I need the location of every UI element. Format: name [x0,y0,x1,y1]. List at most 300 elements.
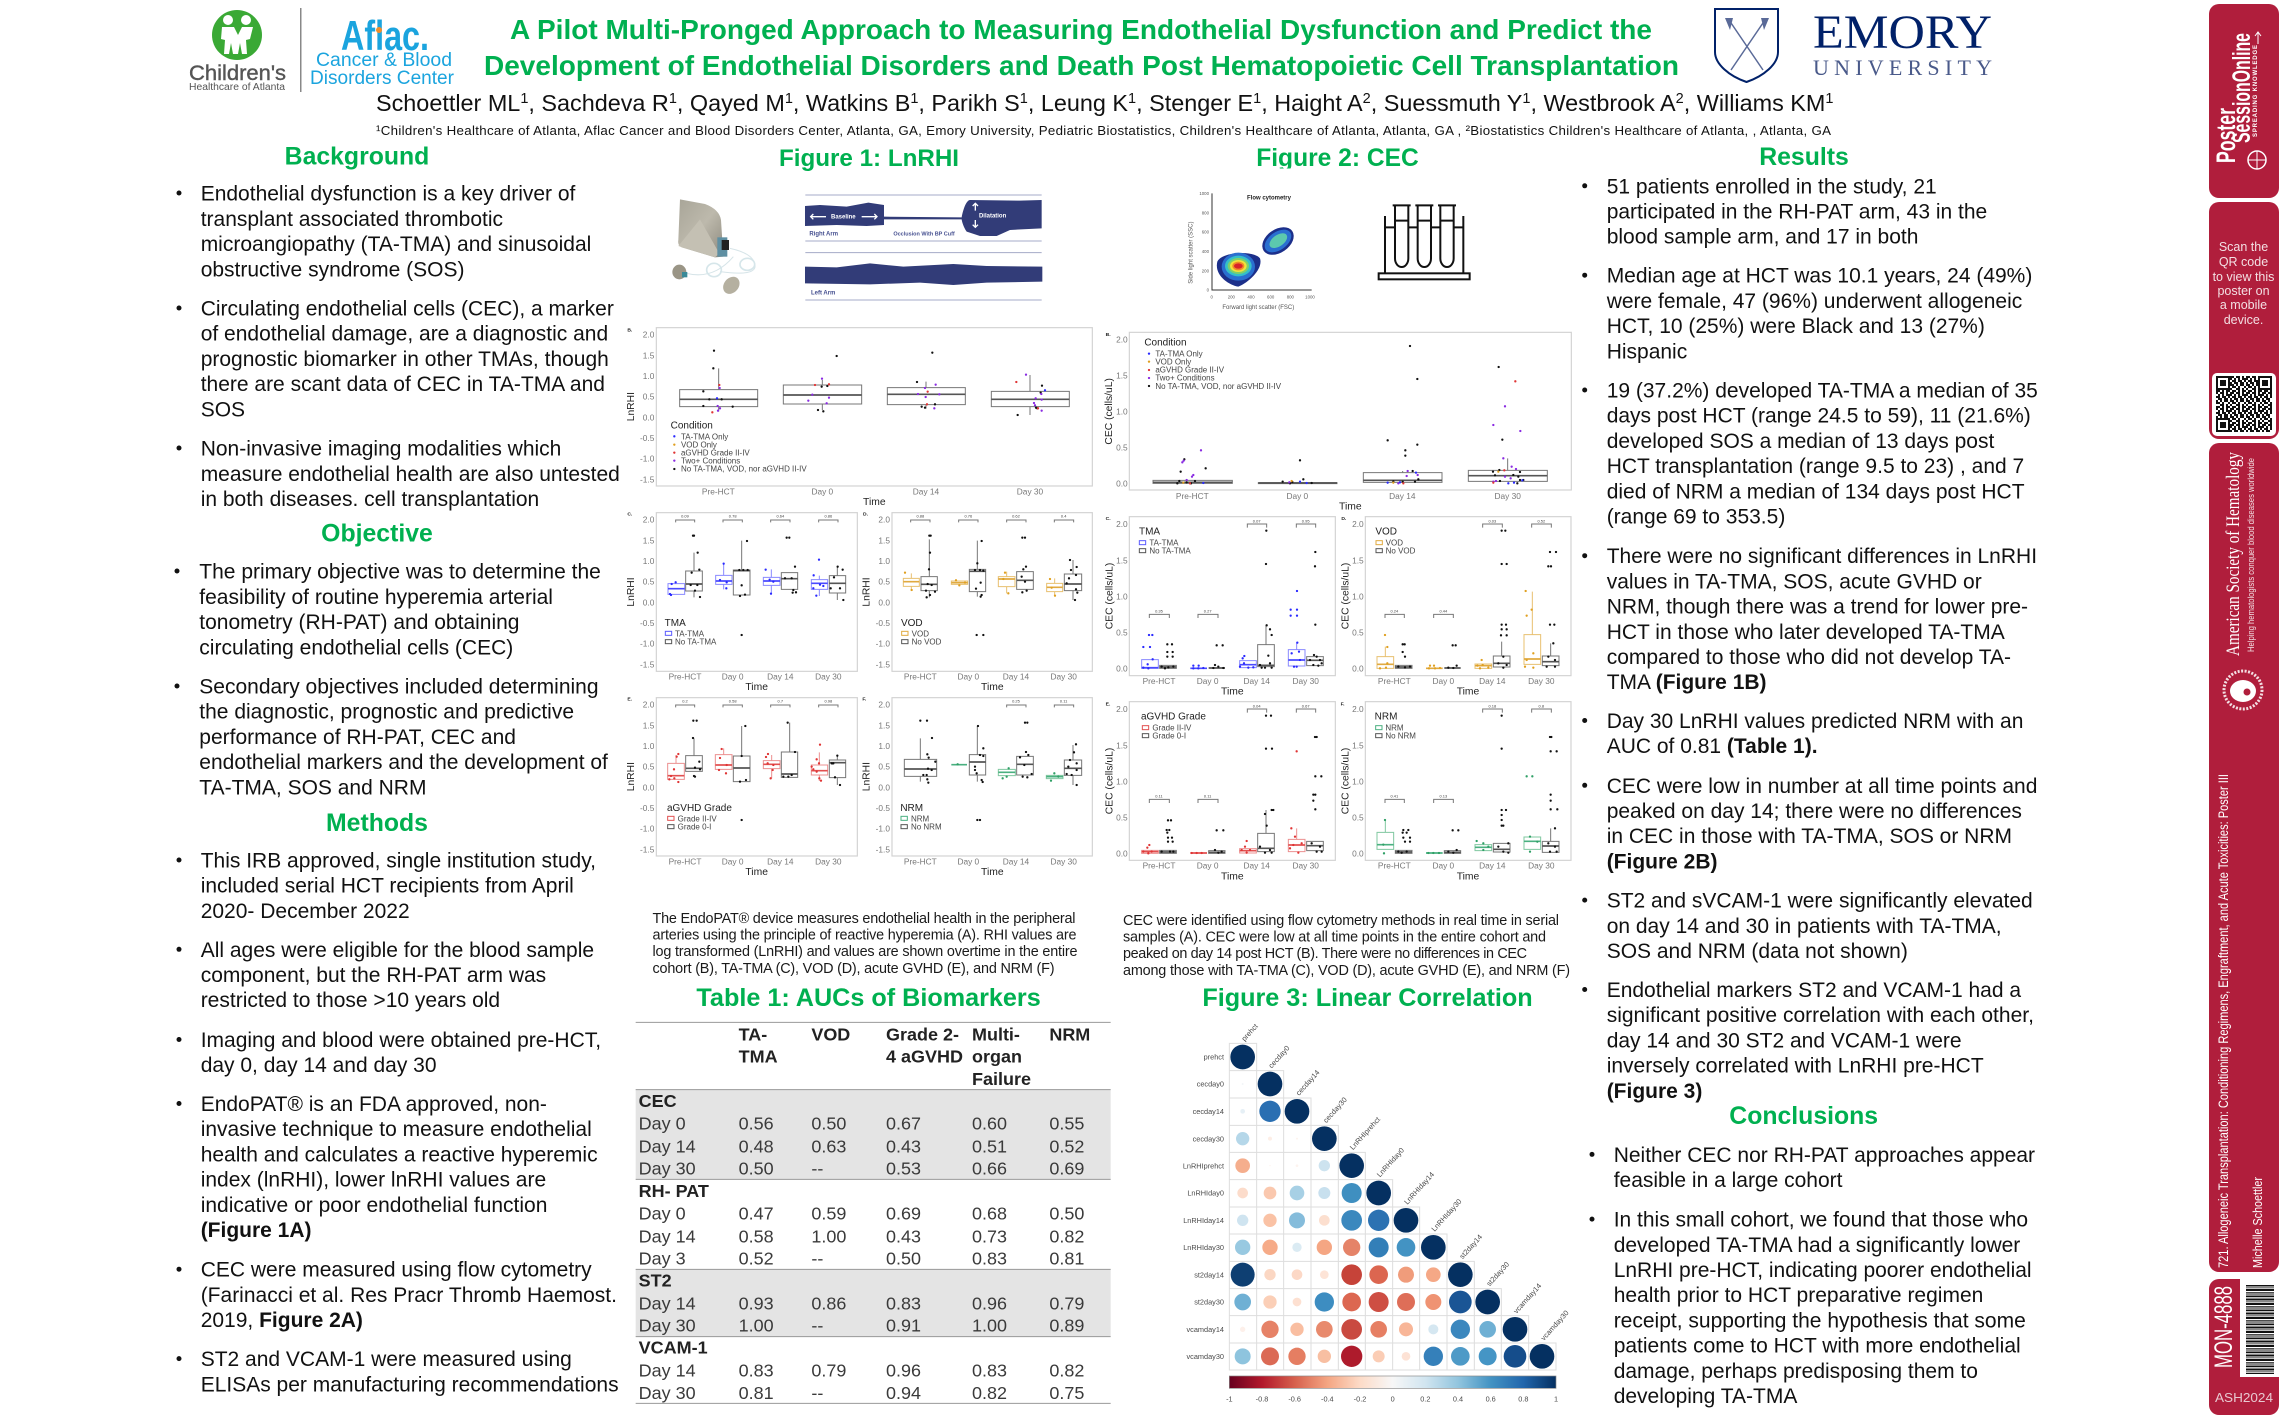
chart: Figure 2B CEC overall: Pre-HCT [1176,491,1209,501]
chart: Figure 1C LnRHI by TMA: 0.5 [643,577,655,587]
logo divider [300,8,302,92]
chart: Figure 1E LnRHI by aGVHD: 0.5 [643,762,655,772]
authors: 1 [1522,91,1530,107]
chart: Figure 2D CEC by VOD: 0.03 [1488,518,1497,523]
authors: , Watkins B [793,90,910,116]
chart: Figure 1D LnRHI by VOD: Time [981,682,1004,693]
column labels: cecday0 [1266,1044,1291,1070]
text block: methods bullets: 2020- December 2022 [201,900,410,923]
text block: methods bullets: indicative or poor endothelial function [201,1194,547,1217]
text block: results bullets: Median age at HCT was 10.1 years, 24 (49%) [1607,265,2032,288]
table: AUCs of biomarkers: TA- [739,1024,767,1044]
chart: Figure 2F CEC by NRM: 0.13 [1439,793,1448,798]
chart: Figure 1B LnRHI overall: Day 14 [913,487,940,497]
chart: Figure 1C LnRHI by TMA: TMA [665,618,686,629]
text block: results bullets: Day 30 LnRHI values predicted NRM with an [1607,710,2023,733]
image: flow cytometry scatter: 1000 [1305,295,1315,300]
text block: results bullets: died of NRM a median of 134 days post HCT [1607,480,2025,503]
table: AUCs of biomarkers: Day 14 [639,1136,696,1156]
text block: results bullets: TMA [1607,671,1656,694]
table: AUCs of biomarkers: 0.91 [886,1316,921,1336]
table: AUCs of biomarkers: 0.94 [886,1383,921,1403]
chart: Figure 2F CEC by NRM [1340,702,1571,882]
affiliations: ¹Children's Healthcare of Atlanta, Aflac Cancer and Blood Disorders Center, Atlanta, GA, Emory University, Pediatric Biostatistics, Children's Healthcare of Atlanta, Atlanta, GA , ²Biostatistics Children's Healthcare of Atlanta, , Atlanta, GA [376,123,1831,138]
logo: Aflac Cancer and Blood Disorders Center: Disorders Center [310,68,455,89]
chart: Figure 1F LnRHI by NRM: Time [981,867,1004,878]
authors: , Leung K [1028,90,1128,116]
table: AUCs of biomarkers: 0.66 [972,1159,1007,1179]
chart: Figure 1C LnRHI by TMA: -1.5 [640,659,655,669]
text block: results bullets: compared to those who did not develop TA- [1607,646,2011,669]
text block: methods bullets: (Figure 1A) [201,1219,312,1242]
row labels: prehct [1204,1053,1224,1062]
chart: Figure 2E CEC by aGVHD: Day 30 [1292,861,1319,871]
heading: Table 1: Table 1: AUCs of Biomarkers [696,984,1041,1012]
heading: Figure 2: Figure 2: CEC [1256,145,1419,172]
text block: results bullets: 51 patients enrolled in the study, 21 [1607,175,1937,198]
table: AUCs of biomarkers: 0.82 [1049,1226,1084,1246]
table: AUCs of biomarkers: NRM [1049,1024,1090,1044]
table: AUCs of biomarkers: organ [972,1047,1022,1067]
image: flow cytometry scatter: 800 [1287,295,1295,300]
chart: Figure 2C CEC by TMA: 1.0 [1116,591,1128,601]
table: AUCs of biomarkers: 0.86 [811,1293,846,1313]
column labels: st2day14 [1457,1233,1484,1261]
column labels: LnRHIday30 [1429,1197,1463,1233]
chart: Figure 1B LnRHI overall: -1.0 [640,454,655,464]
table: AUCs of biomarkers: TMA [739,1047,778,1067]
row labels: st2day14 [1194,1270,1224,1279]
chart: Figure 1B LnRHI overall: Pre-HCT [702,487,735,497]
chart: Figure 1D LnRHI by VOD [861,512,1092,693]
chart: Figure 1E LnRHI by aGVHD: -0.5 [640,803,655,813]
chart: Figure 2D CEC by VOD: Day 30 [1528,676,1555,686]
chart: Figure 1F LnRHI by NRM: Day 30 [1050,857,1077,867]
chart: Figure 3 correlation matrix [1183,1022,1571,1403]
chart: Figure 2C CEC by TMA: 0.35 [1155,608,1164,613]
chart: Figure 2C CEC by TMA [1104,516,1335,697]
logo: Emory University: UNIVERSITY [1813,55,1992,80]
table: AUCs of biomarkers: -- [811,1159,823,1179]
row labels: LnRHIday0 [1187,1189,1224,1198]
text block: results bullets: Hispanic [1607,340,1687,363]
chart: Figure 2F CEC by NRM: 0.5 [1352,812,1364,822]
table: AUCs of biomarkers: Day 14 [639,1293,696,1313]
chart: Figure 1F LnRHI by NRM [861,697,1092,878]
image: RH-PAT waveform [805,195,1042,300]
table: AUCs of biomarkers: 0.52 [739,1249,774,1269]
text block: background bullets: measure endothelial health are also untested [201,463,620,486]
colour scale: 0.2 [1420,1394,1430,1403]
colour scale: -0.4 [1321,1394,1334,1403]
chart: Figure 1C LnRHI by TMA: Day 14 [767,672,794,682]
table: AUCs of biomarkers: Day 14 [639,1226,696,1246]
chart: Figure 1E LnRHI by aGVHD: 0.7 [778,699,784,704]
heading: Methods: Methods [326,810,428,837]
chart: Figure 1F LnRHI by NRM: 0.0 [878,782,890,792]
chart: Figure 2C CEC by TMA: 0.0 [1116,663,1128,673]
table: AUCs of biomarkers: 0.75 [1049,1383,1084,1403]
table: AUCs of biomarkers: 0.83 [886,1293,921,1313]
chart: Figure 1D LnRHI by VOD: No VOD [912,638,942,647]
authors: 1 [785,91,793,107]
chart: Figure 1B LnRHI overall: Day 0 [811,487,834,497]
image: EndoPAT device [672,199,755,297]
chart: Figure 2C CEC by TMA: Day 30 [1292,676,1319,686]
chart: Figure 1B LnRHI overall: Time [863,497,886,508]
caption: Figure 2: CEC were identified using flow cytometry methods in real time in serial [1123,913,1559,929]
chart: Figure 2B CEC overall: 1.5 [1116,370,1128,380]
chart: Figure 1E LnRHI by aGVHD: -1.5 [640,844,655,854]
text block: methods bullets: index (lnRHI), lower lnRHI values are [201,1169,546,1192]
text block: background bullets: Endothelial dysfunction is a key driver of [201,183,576,206]
text block: results bullets: values in TA-TMA, SOS, acute GVHD or [1607,570,1982,593]
chart: Figure 1F LnRHI by NRM: 1.5 [878,720,890,730]
row labels: LnRHIday30 [1183,1243,1224,1252]
chart: Figure 2C CEC by TMA: 0.27 [1204,608,1212,613]
authors: Schoettler ML [376,90,520,116]
table: AUCs of biomarkers: Multi- [972,1024,1020,1044]
chart: Figure 1F LnRHI by NRM: No NRM [911,823,942,832]
text block: results bullets: NRM, though there was a trend for lower pre- [1607,596,2028,619]
table: AUCs of biomarkers: Day 30 [639,1383,696,1403]
authors: 2 [1363,91,1371,107]
chart: Figure 2F CEC by NRM: 0.8 [1539,703,1545,708]
logo: Children's Healthcare of Atlanta: Children's [189,62,286,85]
text block: results bullets: CEC were low in number at all time points and [1607,775,2037,798]
sidebar panel: American Society of Hematology and session: American Society of Hematology [2223,452,2244,656]
image: flow cytometry scatter: Forward light scatter (FSC) [1222,305,1294,311]
chart: Figure 2D CEC by VOD: Day 14 [1479,676,1506,686]
chart: Figure 1B LnRHI overall: -1.5 [640,474,655,484]
chart: Figure 2B CEC overall: 2.0 [1116,334,1128,344]
chart: Figure 2E CEC by aGVHD [1104,702,1335,882]
chart: Figure 2C CEC by TMA: No TA-TMA [1149,547,1191,556]
chart: Figure 2B CEC overall: VOD Only [1155,358,1191,367]
chart: Figure 2B CEC overall [1104,332,1571,512]
chart: Figure 1D LnRHI by VOD: 1.0 [878,556,890,566]
table: AUCs of biomarkers: 0.53 [886,1159,921,1179]
chart: Figure 1D LnRHI by VOD: 2.0 [878,515,890,525]
image: RH-PAT waveform: Occlusion With BP Cuff [893,231,955,237]
text block: results bullets: developed SOS a median of 13 days post [1607,430,1994,453]
chart: Figure 2B CEC overall: Day 14 [1389,491,1416,501]
chart: Figure 1F LnRHI by NRM: 0.25 [1012,699,1021,704]
table: AUCs of biomarkers: Failure [972,1069,1031,1089]
sidebar panel: PosterSessionOnline logo: Poster [2211,108,2241,163]
chart: Figure 1D LnRHI by VOD: -1.0 [876,639,890,649]
chart: Figure 2D CEC by VOD: 2.0 [1352,519,1364,529]
sidebar panel: poster number and barcode: MON-4888 [2210,1286,2238,1368]
table: AUCs of biomarkers: 0.83 [972,1361,1007,1381]
text block: conclusions bullets: developing TA-TMA [1614,1385,1797,1408]
chart: Figure 1D LnRHI by VOD: D. [863,512,869,518]
row labels: cecday30 [1193,1134,1224,1143]
text block: results bullets: inversely correlated with LnRHI pre-HCT [1607,1055,1984,1078]
text block: results bullets: 19 (37.2%) developed TA-TMA a median of 35 [1607,380,2038,402]
colour scale: 0.4 [1453,1394,1463,1403]
chart: Figure 2F CEC by NRM: Time [1457,871,1480,882]
authors: 1 [669,91,677,107]
caption: Figure 2: samples (A). CEC were low at all time points in the entire cohort and [1123,930,1546,946]
table: AUCs of biomarkers: 0.68 [972,1204,1007,1224]
column labels [1239,1022,1571,1342]
text block: background bullets: SOS [201,398,245,421]
text block: objective bullets: performance of RH-PAT, CEC and [199,726,516,749]
table: AUCs of biomarkers: -- [811,1316,823,1336]
chart: Figure 2B CEC overall: B. [1106,332,1111,338]
chart: Figure 2E CEC by aGVHD: 0.5 [1116,812,1128,822]
chart: Figure 2B CEC overall: aGVHD Grade II-IV [1155,366,1225,375]
image: RH-PAT waveform: Baseline [831,214,856,220]
text block: results bullets: on day 14 and 30 in patients with TA-TMA, [1607,915,2002,938]
chart: Figure 2C CEC by TMA: 2.0 [1116,519,1128,529]
table: AUCs of biomarkers: 0.63 [811,1136,846,1156]
caption: Figure 2: among those with TA-TMA (C), VOD (D), acute GVHD (E), and NRM (F) [1123,963,1570,979]
chart: Figure 2F CEC by NRM: NRM [1385,724,1404,733]
chart: Figure 1D LnRHI by VOD: 0.88 [916,513,925,518]
table: AUCs of biomarkers: 0.60 [972,1114,1007,1134]
heading: Objective: Objective [321,521,433,548]
table: AUCs of biomarkers: 0.43 [886,1226,921,1246]
text block: methods bullets: 2019, [201,1309,259,1332]
text block: methods bullets: ST2 and VCAM-1 were measured using [201,1348,572,1371]
chart: Figure 2F CEC by NRM: Day 30 [1528,861,1555,871]
chart: Figure 2E CEC by aGVHD: Day 0 [1197,861,1219,871]
sidebar panel: QR code: QR code [2219,255,2268,269]
chart: Figure 2D CEC by VOD: VOD [1386,539,1403,548]
chart: Figure 2B CEC overall: 0.5 [1116,442,1128,452]
text block: conclusions bullets: feasible in a large cohort [1614,1169,1843,1192]
text block: objective bullets: the diagnostic, prognostic and predictive [199,701,574,724]
chart: Figure 2E CEC by aGVHD: 0.67 [1302,703,1310,708]
chart: Figure 1C LnRHI by TMA: 0.64 [776,513,785,518]
text block: background bullets: Non-invasive imaging modalities which [201,438,561,461]
chart: Figure 2E CEC by aGVHD: Time [1221,871,1244,882]
text block: objective bullets: Secondary objectives included determining [199,676,599,698]
text block: results bullets: HCT transplantation (range 9.5 to 23) , and 7 [1607,455,2024,478]
chart: Figure 1C LnRHI by TMA: -1.0 [640,639,655,649]
sidebar panel: QR code: a mobile [2220,298,2267,312]
chart: Figure 1E LnRHI by aGVHD: Day 0 [722,857,744,867]
row labels: cecday14 [1193,1107,1224,1116]
text block: background bullets: microangiopathy (TA-TMA) and sinusoidal [201,233,591,256]
text block: conclusions bullets: developed TA-TMA had a significantly lower [1614,1234,2020,1257]
table: AUCs of biomarkers: 0.82 [1049,1361,1084,1381]
table: AUCs of biomarkers: 0.93 [739,1293,774,1313]
text block: results bullets: peaked on day 14; there were no differences [1607,800,2022,823]
chart: Figure 2D CEC by VOD: Day 0 [1432,676,1455,686]
table: AUCs of biomarkers: ST2 [639,1271,672,1291]
table: AUCs of biomarkers: Day 3 [639,1249,686,1269]
text block: methods bullets: CEC were measured using flow cytometry [201,1259,592,1282]
colour scale: 0.8 [1518,1394,1528,1403]
authors: 2 [1676,91,1684,107]
chart: Figure 2F CEC by NRM: NRM [1375,712,1397,723]
text block: conclusions bullets: health prior to HCT preparative regimen [1614,1284,1983,1307]
authors: , Suessmuth Y [1371,90,1523,116]
text block: conclusions bullets: damage, perhaps predisposing them to [1614,1360,1978,1383]
text block: background bullets: prognostic biomarker in other TMAs, though [201,348,609,371]
chart: Figure 2E CEC by aGVHD: Grade 0-I [1152,732,1186,741]
chart: Figure 2F CEC by NRM: 2.0 [1352,704,1364,714]
column labels: st2day30 [1484,1260,1511,1288]
text block: background bullets: Circulating endothelial cells (CEC), a marker [201,298,614,320]
text block: objective bullets: feasibility of routine hyperemia arterial [199,586,553,609]
heading: Results: Results [1759,144,1849,171]
text block: background bullets: obstructive syndrome (SOS) [201,258,464,281]
logo: Emory University [1715,6,1992,82]
text block: methods bullets: invasive technique to measure endothelial [201,1118,592,1141]
chart: Figure 1D LnRHI by VOD: 0.0 [878,597,890,607]
sidebar panel: PosterSessionOnline logo [2209,4,2279,198]
chart: Figure 2D CEC by VOD: 0.44 [1439,608,1448,613]
chart: Figure 1E LnRHI by aGVHD: Day 30 [815,857,842,867]
heading: Figure 1: Figure 1: LnRHI [779,145,959,172]
chart: Figure 2F CEC by NRM: 0.41 [1390,793,1399,798]
image: flow cytometry scatter: 600 [1202,230,1210,235]
image: RH-PAT waveform: Right Arm [809,232,838,238]
correlation circles [1230,1045,1554,1369]
table: AUCs of biomarkers: RH- PAT [639,1181,709,1201]
authors: 1 [520,91,528,107]
chart: Figure 1D LnRHI by VOD: -1.5 [876,659,890,669]
title: Development of Endothelial Disorders and Death Post Hematopoietic Cell Transplantation [484,50,1679,81]
text block: methods bullets: day 0, day 14 and day 30 [201,1054,437,1077]
chart: Figure 2F CEC by NRM: F. [1341,702,1345,708]
text block: methods bullets: All ages were eligible for the blood sample [201,939,594,962]
authors: , Parikh S [918,90,1020,116]
chart: Figure 2C CEC by TMA: Day 14 [1243,676,1270,686]
chart: Figure 2D CEC by VOD: VOD [1375,527,1397,538]
text block: objective bullets: The primary objective was to determine the [199,561,601,584]
chart: Figure 1D LnRHI by VOD: 0.5 [878,577,890,587]
chart: Figure 2F CEC by NRM: Day 0 [1432,861,1455,871]
chart: Figure 1D LnRHI by VOD: VOD [901,618,923,629]
table: AUCs of biomarkers: 0.48 [739,1136,774,1156]
authors: 1 [1253,91,1261,107]
column labels: LnRHIday14 [1402,1170,1436,1206]
image: flow cytometry scatter: 400 [1247,295,1255,300]
chart: Figure 1E LnRHI by aGVHD [626,697,857,878]
text block: background bullets: of endothelial damage, are a diagnostic and [201,323,608,346]
table: AUCs of biomarkers: VCAM-1 [639,1338,708,1358]
chart: Figure 1E LnRHI by aGVHD: Grade II-IV [678,814,717,823]
chart: Figure 1B LnRHI overall: -0.5 [640,433,655,443]
chart: Figure 2C CEC by TMA: 0.95 [1302,518,1310,523]
logo: Aflac Cancer and Blood Disorders Center: Aflac. [341,12,429,59]
table: AUCs of biomarkers: 0.50 [739,1159,774,1179]
column labels: LnRHIprehct [1348,1115,1382,1152]
colour scale: -0.2 [1354,1394,1366,1403]
chart: Figure 1C LnRHI by TMA: Pre-HCT [669,672,701,682]
image: flow cytometry scatter: 200 [1228,295,1236,300]
chart: Figure 2E CEC by aGVHD: 1.5 [1116,740,1128,750]
chart: Figure 2E CEC by aGVHD: 1.0 [1116,776,1128,786]
text block: results bullets: (range 69 to 353.5) [1607,506,1785,528]
column labels: LnRHIday0 [1375,1146,1406,1179]
caption: Figure 2: peaked on day 14 post HCT (B). There were no differences in CEC [1123,946,1527,962]
chart: Figure 1D LnRHI by VOD: 0.76 [964,513,973,518]
chart: Figure 2F CEC by NRM: No NRM [1385,732,1416,741]
chart: Figure 1D LnRHI by VOD: Pre-HCT [904,672,937,682]
colour scale: 1 [1554,1394,1558,1403]
table: AUCs of biomarkers: 0.58 [739,1226,774,1246]
chart: Figure 1B LnRHI overall [626,327,1092,508]
table: AUCs of biomarkers: 0.51 [972,1136,1007,1156]
text block: results bullets: (Table 1). [1727,735,1818,758]
row labels: vcamday14 [1187,1325,1224,1334]
grid [1229,1043,1556,1370]
chart: Figure 2C CEC by TMA: Pre-HCT [1143,676,1175,686]
image: RH-PAT waveform: Left Arm [811,290,835,296]
sidebar panel: QR code: device. [2224,313,2263,327]
heading: Figure 3: Figure 3: Linear Correlation [1202,984,1533,1012]
text block: results bullets: significant positive correlation with each other, [1607,1004,2034,1027]
chart: Figure 2E CEC by aGVHD: 0.04 [1253,703,1261,708]
chart: Figure 1C LnRHI by TMA: Time [745,682,768,693]
chart: Figure 1F LnRHI by NRM: -1.0 [876,824,890,834]
chart: Figure 1B LnRHI overall: 0.5 [643,392,655,402]
sidebar panel: PosterSessionOnline logo: SPREADING KNOWLEDGE [2253,45,2259,137]
chart: Figure 2F CEC by NRM: 0.18 [1488,703,1497,708]
chart: Figure 1D LnRHI by VOD: VOD [912,629,929,638]
chart: Figure 2C CEC by TMA: C. [1106,516,1111,522]
text block: methods bullets: ELISAs per manufacturing recommendations [201,1373,619,1396]
chart: Figure 1F LnRHI by NRM: LnRHI [861,762,872,791]
text block: results bullets: HCT, 10 (25%) were Black and 13 (27%) [1607,315,1985,338]
chart: Figure 1F LnRHI by NRM: 2.0 [878,700,890,710]
sidebar panel: poster number and barcode [2209,1279,2279,1415]
chart: Figure 2D CEC by VOD: 0.0 [1352,663,1364,673]
chart: Figure 2C CEC by TMA: 0.5 [1116,627,1128,637]
chart: Figure 1F LnRHI by NRM: 1.0 [878,741,890,751]
authors: , Qayed M [677,90,785,116]
chart: Figure 1B LnRHI overall: Two+ Conditions [681,457,740,466]
table: AUCs of biomarkers [636,1022,1111,1403]
chart: Figure 2C CEC by TMA: 1.5 [1116,555,1128,565]
image: RH-PAT waveform: Dilatation [979,213,1007,219]
chart: Figure 1B LnRHI overall: VOD Only [681,440,717,449]
chart: Figure 2E CEC by aGVHD: Grade II-IV [1152,724,1192,733]
table: AUCs of biomarkers: Grade 2- [886,1024,959,1044]
chart: Figure 2D CEC by VOD: 1.0 [1352,591,1364,601]
chart: Figure 1F LnRHI by NRM: F. [862,697,867,703]
chart: Figure 2F CEC by NRM: 0.0 [1352,848,1364,858]
chart: Figure 1E LnRHI by aGVHD: aGVHD Grade [667,803,732,814]
table: AUCs of biomarkers: 0.67 [886,1114,921,1134]
sidebar panel: American Society of Hematology and session: Michelle Schoettler [2250,1176,2265,1268]
caption: Figure 1: The EndoPAT® device measures endothelial health in the peripheral [652,911,1076,927]
table: AUCs of biomarkers: 0.69 [1049,1159,1084,1179]
text block: methods bullets: Figure 2A) [259,1309,363,1332]
chart: Figure 1D LnRHI by VOD: 0.62 [1012,513,1021,518]
chart: Figure 2E CEC by aGVHD: 0.0 [1116,848,1128,858]
text block: methods bullets: This IRB approved, single institution study, [201,850,596,872]
text block: results bullets: blood sample arm, and 17 in both [1607,226,1918,249]
chart: Figure 1E LnRHI by aGVHD: 2.0 [643,700,655,710]
chart: Figure 1E LnRHI by aGVHD: 0.58 [729,699,737,704]
chart: Figure 2F CEC by NRM: 1.0 [1352,776,1364,786]
chart: Figure 2E CEC by aGVHD: Pre-HCT [1143,861,1175,871]
sidebar panel: QR code [2209,202,2279,439]
chart: Figure 2E CEC by aGVHD: E. [1106,702,1111,708]
colour scale [1226,1376,1558,1403]
table: AUCs of biomarkers: 1.00 [739,1316,774,1336]
table: AUCs of biomarkers: 0.79 [1049,1293,1084,1313]
chart: Figure 2B CEC overall: Time [1339,501,1362,512]
chart: Figure 2C CEC by TMA: Time [1221,686,1244,697]
